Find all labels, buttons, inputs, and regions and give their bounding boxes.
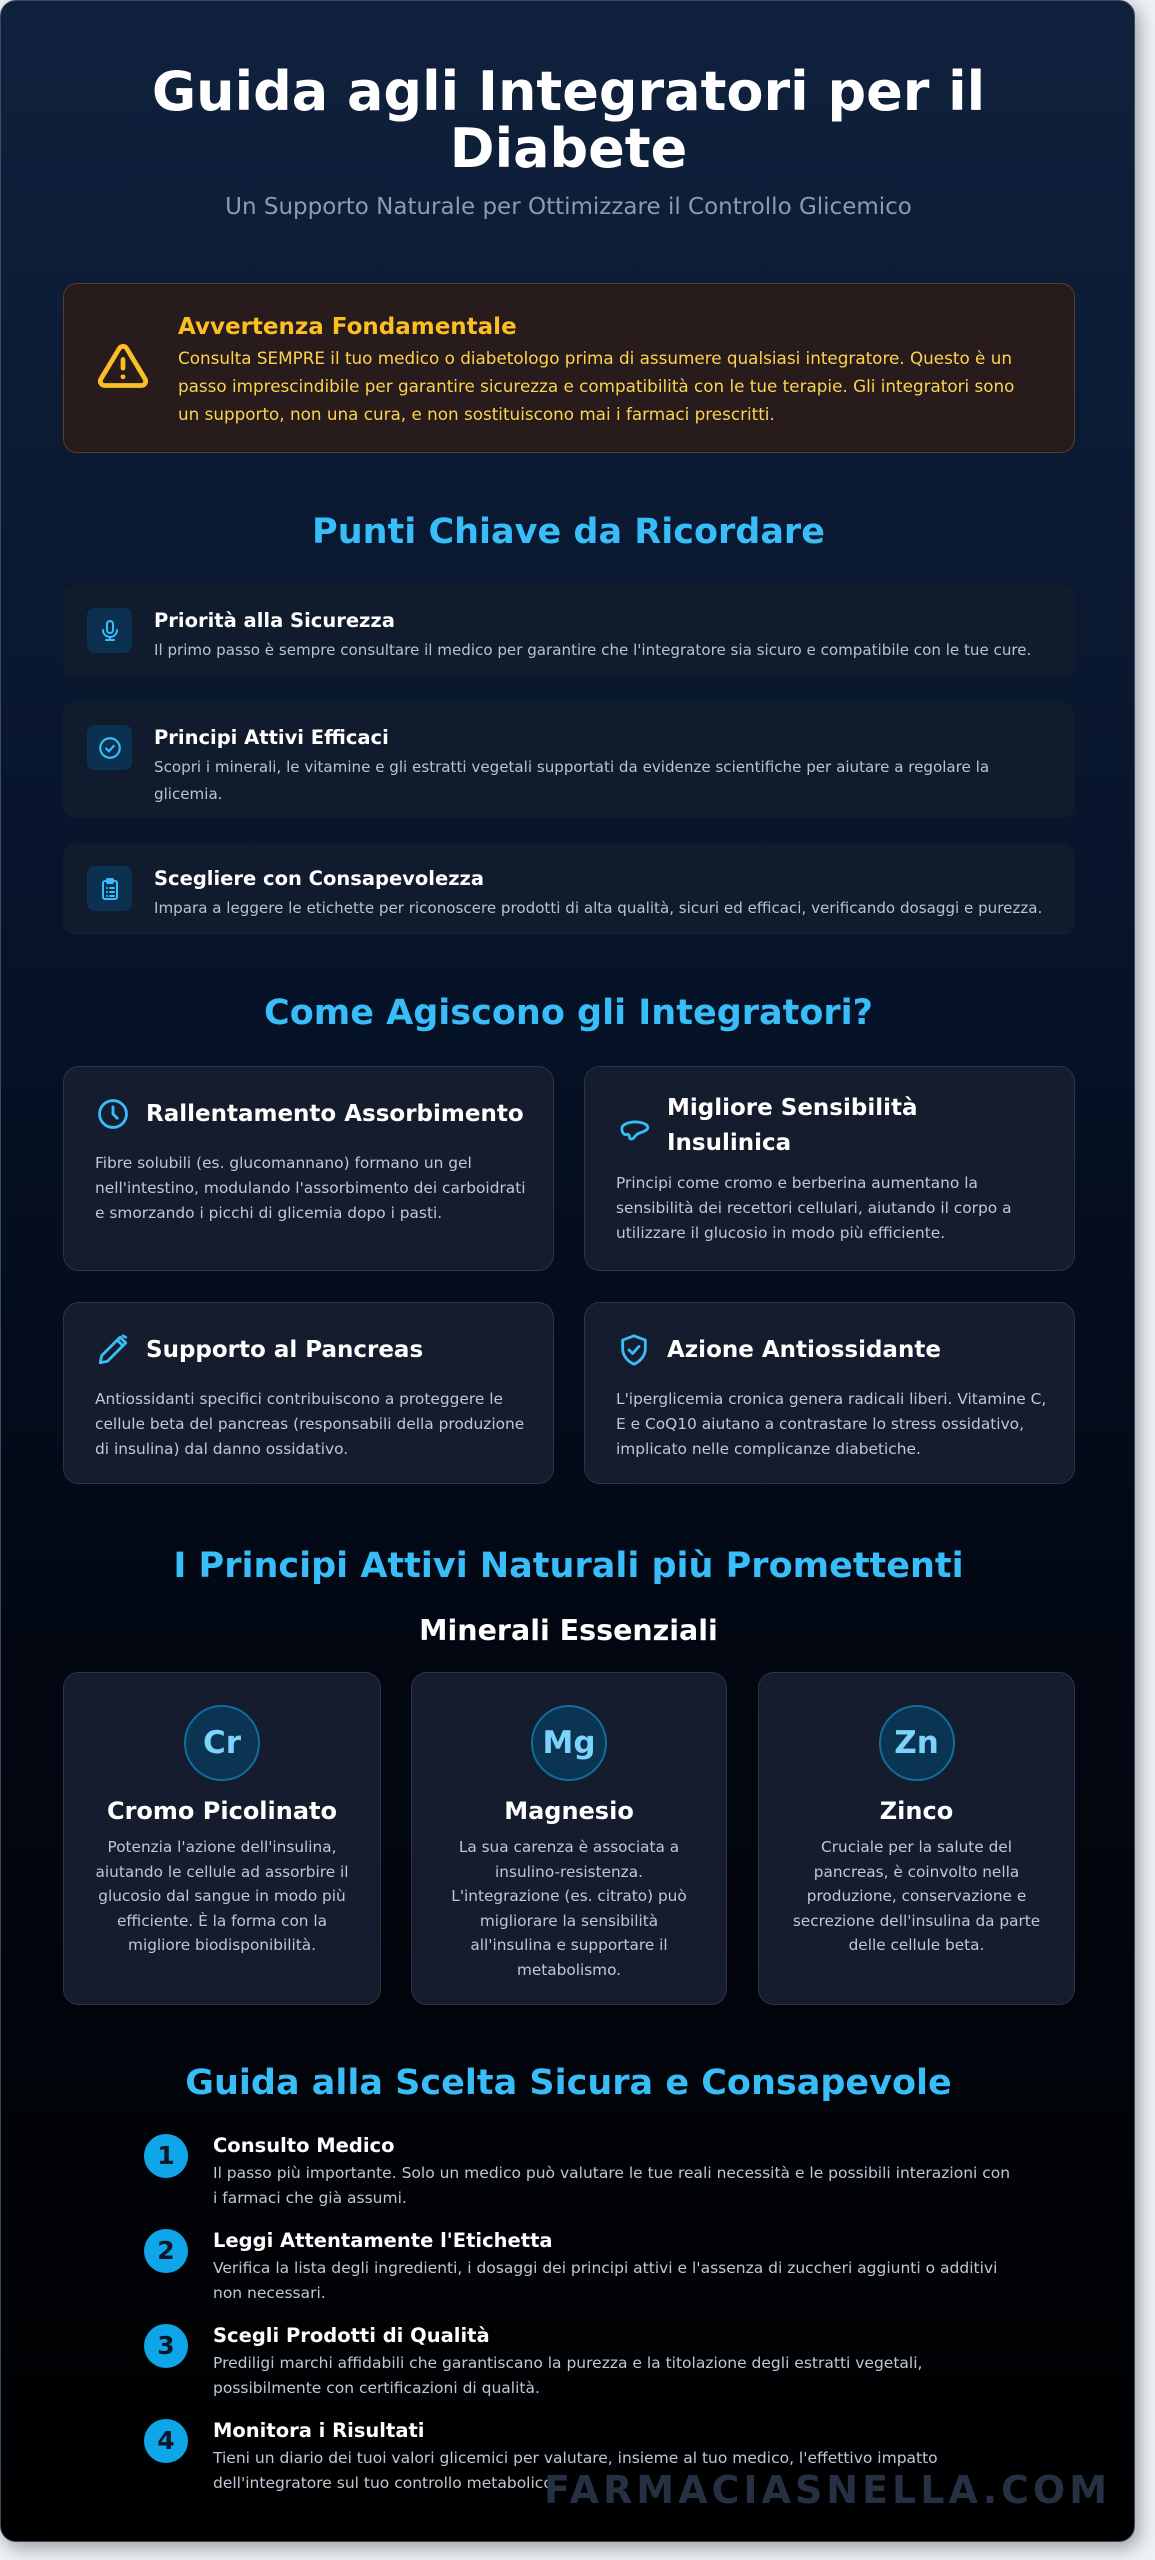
- step 4: 4: [157, 2426, 175, 2455]
- panel: pancreas: Antiossidanti specifici contribuiscono a proteggere le: [95, 1390, 503, 1408]
- icon: microphone: [87, 608, 132, 653]
- heading: key points: Punti Chiave da Ricordare: [312, 512, 825, 552]
- title: [152, 60, 985, 180]
- panel: key point 1: Il primo passo è sempre consultare il medico per garantire che l'integratore sia sicuro e compatibile con le tue cure.: [154, 641, 1031, 659]
- panel: zinc: Zinco: [880, 1797, 953, 1825]
- panel: zinc: Cruciale per la salute del pancreas, è coinvolto nella produzione, conservazione e secrezione dell'insulina da parte delle cellule beta.: [793, 1838, 1040, 1954]
- panel: magnesium: [411, 1672, 727, 2005]
- step 3: Prediligi marchi affidabili che garantiscano la purezza e la titolazione degli estratti vegetali,: [213, 2354, 922, 2372]
- panel: chromium: Cr: [203, 1725, 241, 1761]
- panel: antioxidant: L'iperglicemia cronica genera radicali liberi. Vitamine C,: [616, 1390, 1046, 1408]
- icon: clock: [98, 1099, 128, 1129]
- warning text: un supporto, non una cura, e non sostituiscono mai i farmaci prescritti.: [178, 404, 775, 424]
- panel: absorption: nell'intestino, modulando l'assorbimento dei carboidrati: [95, 1179, 526, 1197]
- panel: chromium: Potenzia l'azione dell'insulina, aiutando le cellule ad assorbire il glucosio dal sangue in modo più efficiente. È la forma con la migliore biodisponibilità.: [96, 1838, 348, 1954]
- step 1: 1: [157, 2141, 175, 2170]
- panel: key point 2: Scopri i minerali, le vitamine e gli estratti vegetali supportati da evidenze scientifiche per aiutare a regolare la: [154, 758, 989, 776]
- step 4: dell'integratore sul tuo controllo metabolico.: [213, 2474, 557, 2492]
- step 4: Monitora i Risultati: [213, 2419, 424, 2442]
- icon: warning triangle: [98, 344, 148, 388]
- warning text: Consulta SEMPRE il tuo medico o diabetologo prima di assumere qualsiasi integratore. Questo è un: [178, 348, 1012, 368]
- panel: insulin sensitivity: sensibilità dei recettori cellulari, aiutando il corpo a: [616, 1199, 1012, 1217]
- icon: check circle: [87, 725, 132, 770]
- heading: active principles: I Principi Attivi Naturali più Promettenti: [173, 1546, 964, 1586]
- panel: magnesium: Mg: [542, 1725, 596, 1761]
- panel: insulin sensitivity: Insulinica: [667, 1130, 791, 1156]
- panel: key point 1: Priorità alla Sicurezza: [154, 609, 395, 632]
- panel: insulin sensitivity: Migliore Sensibilità: [667, 1095, 918, 1121]
- step 2: 2: [157, 2236, 175, 2265]
- panel: insulin sensitivity: utilizzare il glucosio in modo più efficiente.: [616, 1224, 945, 1242]
- step 4: [144, 2419, 938, 2492]
- step 3: 3: [157, 2331, 175, 2360]
- step 2: Verifica la lista degli ingredienti, i dosaggi dei principi attivi e l'assenza di zuccheri aggiunti o additivi: [213, 2259, 997, 2277]
- panel: key point 3: Scegliere con Consapevolezza: [154, 867, 484, 890]
- watermark: FARMACIASNELLA.COM: [544, 2468, 1111, 2512]
- step 1: Il passo più importante. Solo un medico può valutare le tue reali necessità e le possibili interazioni con: [213, 2164, 1010, 2182]
- panel: pancreas: [63, 1302, 554, 1484]
- subtitle: Un Supporto Naturale per Ottimizzare il Controllo Glicemico: [225, 194, 912, 220]
- panel: zinc: [758, 1672, 1075, 2005]
- step 2: [144, 2229, 997, 2302]
- panel: warning: [63, 283, 1075, 453]
- step 1: [144, 2134, 1010, 2207]
- panel: absorption: Fibre solubili (es. glucomannano) formano un gel: [95, 1154, 472, 1172]
- panel: absorption: Rallentamento Assorbimento: [146, 1101, 524, 1127]
- icon: pen: [98, 1334, 128, 1364]
- icon: clipboard: [87, 866, 132, 911]
- step 3: Scegli Prodotti di Qualità: [213, 2324, 490, 2347]
- heading: how they work: Come Agiscono gli Integratori?: [264, 993, 873, 1033]
- step 1: Consulto Medico: [213, 2134, 394, 2157]
- panel: chromium: [63, 1672, 381, 2005]
- panel: insulin sensitivity: [584, 1066, 1075, 1271]
- panel: absorption: e smorzando i picchi di glicemia dopo i pasti.: [95, 1204, 442, 1222]
- panel: absorption: [63, 1066, 554, 1271]
- step 4: Tieni un diario dei tuoi valori glicemici per valutare, insieme al tuo medico, l'effettivo impatto: [213, 2449, 938, 2467]
- panel: key point 2: glicemia.: [154, 785, 222, 803]
- panel: key point 3: Impara a leggere le etichette per riconoscere prodotti di alta qualità, sicuri ed efficaci, verificando dosaggi e purezza.: [154, 899, 1042, 917]
- panel: antioxidant: E e CoQ10 aiutano a contrastare lo stress ossidativo,: [616, 1415, 1024, 1433]
- panel: key point 2: Principi Attivi Efficaci: [154, 726, 389, 749]
- icon: shield check: [621, 1334, 647, 1366]
- warning text: [178, 348, 1014, 424]
- warning text: passo imprescindibile per garantire sicurezza e compatibilità con le tue terapie. Gli integratori sono: [178, 376, 1014, 396]
- step 3: possibilmente con certificazioni di qualità.: [213, 2379, 540, 2397]
- step 3: [144, 2324, 922, 2397]
- title: Diabete: [450, 117, 687, 180]
- panel: key point 2: [63, 702, 1075, 818]
- panel: pancreas: cellule beta del pancreas (responsabili della produzione: [95, 1415, 524, 1433]
- panel: chromium: Cromo Picolinato: [107, 1797, 337, 1825]
- title: Guida agli Integratori per il: [152, 60, 985, 123]
- panel: zinc: Zn: [894, 1725, 939, 1761]
- panel: insulin sensitivity: Principi come cromo e berberina aumentano la: [616, 1174, 978, 1192]
- step 1: i farmaci che già assumi.: [213, 2189, 407, 2207]
- panel: key point 1: [63, 585, 1075, 677]
- icon: liver: [620, 1120, 650, 1140]
- step 2: Leggi Attentamente l'Etichetta: [213, 2229, 553, 2252]
- panel: antioxidant: Azione Antiossidante: [667, 1337, 941, 1363]
- panel: magnesium: La sua carenza è associata a insulino-resistenza. L'integrazione (es. citrato) può migliorare la sensibilità all'insulina e supportare il metabolismo.: [451, 1838, 687, 1978]
- panel: pancreas: di insulina) dal danno ossidativo.: [95, 1440, 348, 1458]
- panel: pancreas: Supporto al Pancreas: [146, 1337, 423, 1363]
- panel: antioxidant: implicato nelle complicanze diabetiche.: [616, 1440, 921, 1458]
- panel: key point 3: [63, 843, 1075, 935]
- panel: antioxidant: [584, 1302, 1075, 1484]
- warning heading: Avvertenza Fondamentale: [178, 314, 517, 340]
- heading: safe choice guide: Guida alla Scelta Sicura e Consapevole: [185, 2063, 952, 2103]
- panel: magnesium: Magnesio: [504, 1797, 634, 1825]
- subheading: minerals: Minerali Essenziali: [419, 1614, 718, 1647]
- step 2: non necessari.: [213, 2284, 326, 2302]
